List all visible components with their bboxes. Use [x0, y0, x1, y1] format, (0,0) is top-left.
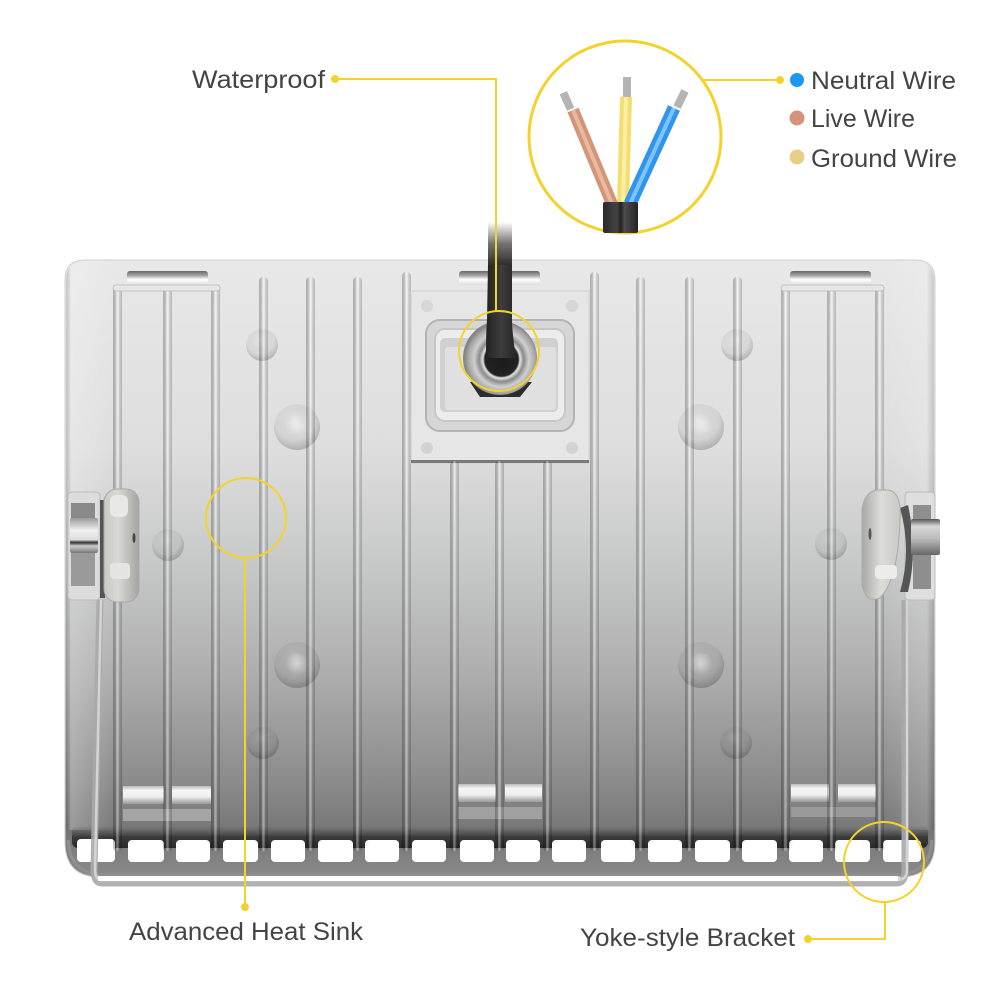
label: Waterproof: Waterproof: [192, 66, 325, 94]
heat sink fins: [113, 272, 884, 851]
dark vent band: [72, 826, 928, 848]
leader dot: [331, 75, 339, 83]
leader line: [703, 79, 778, 81]
left edge highlight: [66, 261, 115, 830]
highlight ring: [206, 478, 286, 558]
legend: wire colours: [790, 67, 957, 173]
housing body: [65, 260, 935, 877]
ring: wire close-up: [529, 41, 721, 233]
leader line: [808, 902, 885, 939]
screw bosses: [152, 329, 847, 759]
callout: wire detail: [529, 41, 784, 233]
wire: ground, yellow: [623, 97, 626, 204]
right edge highlight: [885, 261, 934, 830]
wire: neutral, blue: [630, 108, 674, 204]
leader dot: [241, 903, 249, 911]
left mounting knob: [68, 489, 139, 602]
icon: three-core wires: [560, 77, 689, 233]
vent slots: [77, 839, 921, 862]
panel: flood light housing: [65, 222, 940, 883]
wire tips: [560, 77, 689, 111]
legend item: live: Live Wire: [811, 105, 915, 133]
mounting plate: [411, 291, 589, 463]
callout: bracket: [580, 822, 924, 952]
legend item: neutral: Neutral Wire: [811, 67, 956, 95]
wire: live, orange: [573, 110, 612, 204]
black cable sleeve: [603, 202, 638, 233]
bottom frame rail: [68, 840, 932, 875]
leader dot: [804, 935, 812, 943]
legend item: ground: Ground Wire: [811, 145, 957, 173]
callout: waterproof: [192, 66, 539, 391]
label: Yoke-style Bracket: Yoke-style Bracket: [580, 924, 795, 952]
label: Advanced Heat Sink: Advanced Heat Sink: [129, 918, 364, 946]
highlight ring: [844, 822, 924, 902]
callout: heat sink: [129, 478, 364, 946]
top tabs: [127, 271, 871, 285]
bottom clip tabs: [123, 784, 876, 821]
leader line: [335, 79, 496, 311]
yoke bracket: [94, 600, 907, 883]
highlight ring: [459, 311, 539, 391]
waterproof cable gland: [463, 321, 537, 397]
black cable: [486, 222, 516, 358]
lower fins: [450, 461, 552, 851]
right mounting knob: [862, 490, 940, 600]
leader line: [244, 558, 246, 907]
leader dot: [776, 76, 784, 84]
